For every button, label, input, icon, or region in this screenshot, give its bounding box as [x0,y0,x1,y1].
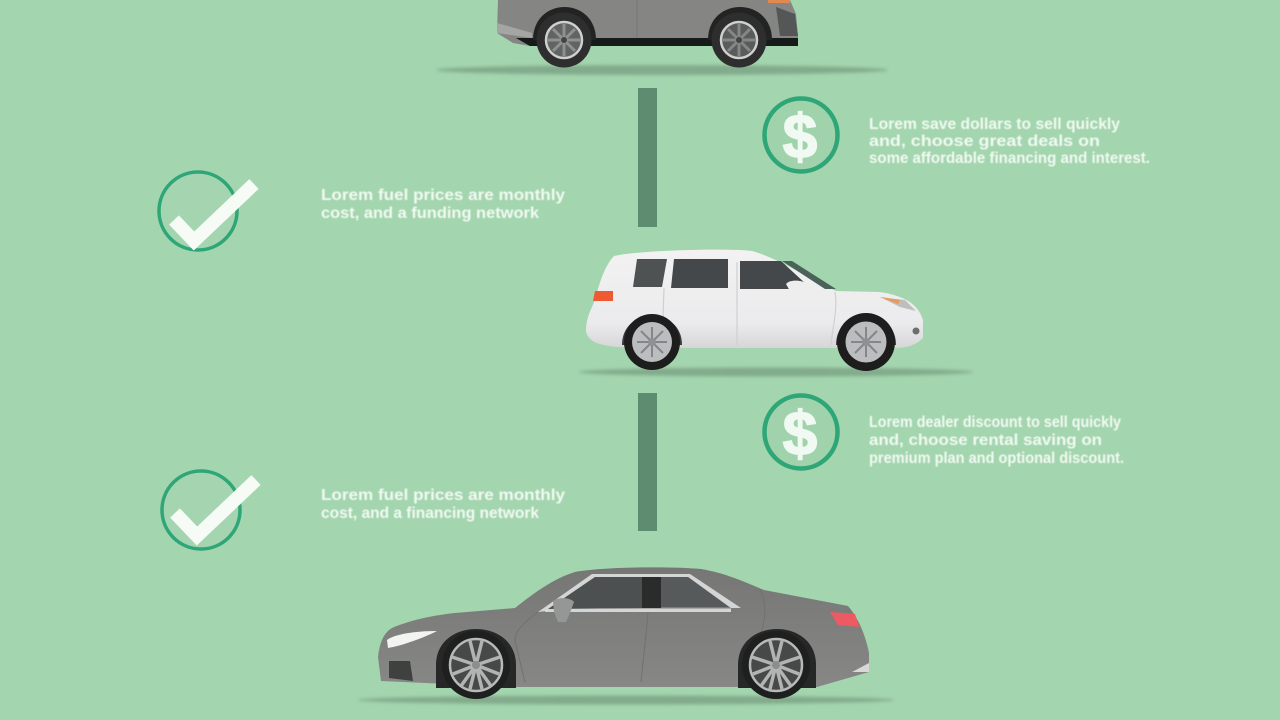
text block: upper left: Lorem fuel prices are monthly [321,187,565,204]
headlight [387,631,437,648]
windows [633,259,667,287]
tail light [830,612,859,627]
text block: lower right: Lorem dealer discount to sell quickly [869,414,1121,431]
text block: lower right: premium plan and optional discount. [869,450,1124,467]
front wheel [837,313,895,371]
ground shadow [436,65,888,75]
text block: upper left [321,187,565,222]
car: grey sedan, bottom [358,567,894,704]
door lines [515,590,765,682]
SUV body [497,0,798,46]
mirror [553,598,574,622]
ground shadow [358,696,894,704]
tail light [593,291,613,301]
text block: lower left [321,487,565,522]
text block: top right: Lorem save dollars to sell quickly [869,116,1120,133]
check badge 1 [159,172,254,250]
windows [548,577,642,609]
wheel arches [622,316,682,345]
text block: lower right [869,414,1124,467]
door lines [662,262,836,345]
text block: lower right: and, choose rental saving on [869,432,1102,449]
sedan body [378,567,869,687]
text block: lower left: Lorem fuel prices are monthly [321,487,565,504]
text block: top right: some affordable financing and interest. [869,150,1150,167]
wheel arches [436,629,516,688]
car: grey SUV, top [436,0,888,75]
text block: top right: and, choose great deals on [869,133,1100,150]
headlight [880,297,916,311]
text block: lower left: cost, and a financing network [321,505,539,522]
ground shadow [579,368,973,376]
front wheel [442,631,510,699]
dollar badge 1 [764,98,838,172]
dollar badge 2 [764,396,838,469]
wheel arches [533,7,596,40]
rear wheel [536,12,592,68]
dollar badge 2: $ [783,400,817,469]
check badge 2 [162,471,256,549]
front wheel [712,12,766,68]
mirror [786,281,812,291]
text block: top right [869,116,1150,167]
dollar badge 1: $ [783,103,817,172]
connector bar 2 [638,393,657,531]
connector bar 1 [638,88,657,227]
car: white SUV, middle [579,250,973,376]
window trim [538,574,741,612]
rear reflector [852,663,869,672]
text block: upper left: cost, and a funding network [321,205,539,222]
rear wheel [742,631,810,699]
rear wheel [624,314,680,370]
SUV body [586,250,923,348]
front grille [389,661,413,681]
